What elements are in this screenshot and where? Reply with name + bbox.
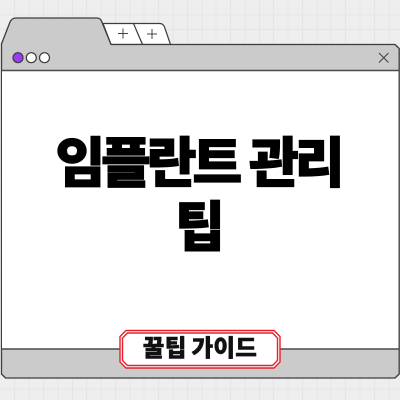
- icon: purple dot: [13, 53, 23, 63]
- tab: plus tab 1: [103, 24, 142, 44]
- icon: close: [379, 53, 388, 62]
- title: [55, 134, 341, 258]
- badge frame: [120, 330, 280, 368]
- tab: plus tab 2: [133, 24, 170, 44]
- icon: white dot: [40, 53, 50, 63]
- icon: white dot: [26, 53, 36, 63]
- title: 임플란트 관리: [55, 134, 341, 194]
- badge label: 꿀팁 가이드: [143, 335, 257, 361]
- panel: white content area: [2, 71, 398, 349]
- title: 팁: [175, 198, 221, 258]
